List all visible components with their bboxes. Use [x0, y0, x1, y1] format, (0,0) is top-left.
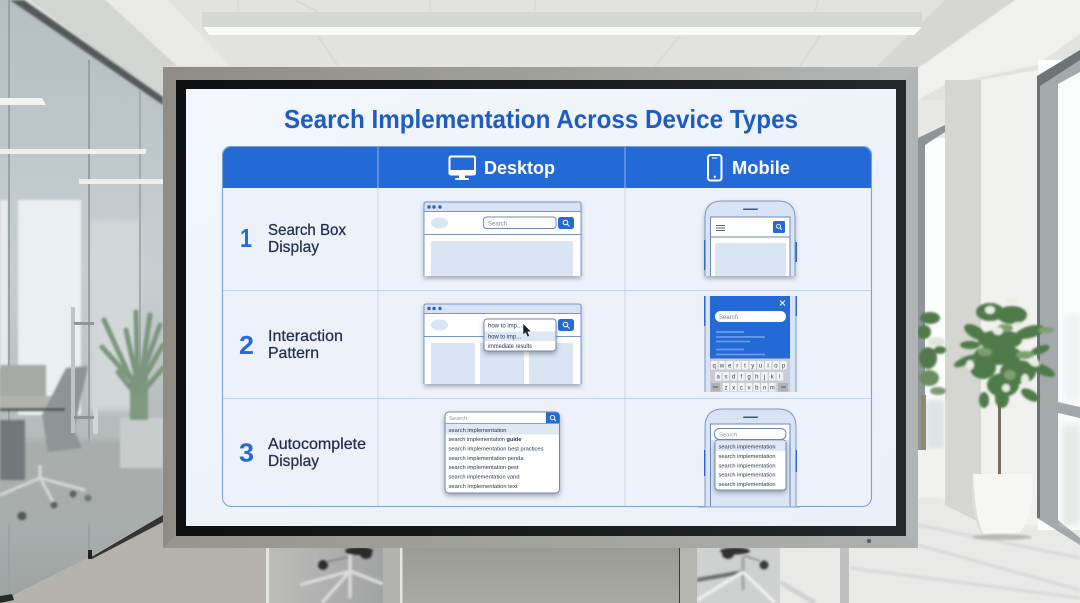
desktop mockup: autocomplete display: search implementation guide: [448, 437, 522, 443]
row 2 label: Pattern: [268, 345, 319, 362]
meeting table and chair: [0, 365, 92, 520]
small plant in white pot: [917, 312, 946, 500]
mobile mockup: search box: [704, 201, 797, 276]
desktop mockup: autocomplete display: search implementation penda: [448, 456, 524, 462]
meeting room plant: [102, 312, 163, 468]
left office chair base: [269, 547, 383, 603]
glass partition wall: [0, 0, 163, 603]
floor: [0, 500, 1080, 603]
right wall and pillar: [918, 70, 1038, 525]
ceiling: [0, 0, 1080, 130]
on-screen keyboard: q: [713, 364, 716, 370]
on-screen keyboard: f: [740, 374, 742, 380]
desktop mockup: search box: [424, 202, 581, 277]
icon: mobile phone: [708, 155, 722, 180]
screen panel: [186, 89, 896, 526]
right office chair base: [697, 548, 815, 603]
desktop mockup: autocomplete display: search implementation vand: [448, 474, 520, 480]
mobile mockup: autocomplete: search implementation: [718, 454, 776, 460]
on-screen keyboard: o: [774, 364, 778, 370]
mobile mockup: autocomplete: search implementation: [718, 463, 776, 469]
display stand: [383, 548, 849, 603]
icon: mouse cursor: [523, 324, 531, 337]
row 1 label: Display: [268, 239, 319, 256]
row 1 label: Search Box: [268, 222, 346, 239]
search dropdown: how to imp...: [488, 322, 522, 330]
on-screen keyboard: z: [724, 386, 728, 392]
on-screen keyboard: v: [748, 386, 750, 392]
mobile mockup: autocomplete: search implementation: [718, 482, 776, 488]
desktop mockup: search box: Search: [488, 222, 507, 228]
mobile mockup: autocomplete: [698, 409, 800, 507]
row 1 label: 1: [240, 223, 252, 253]
header: desktop: Desktop: [484, 157, 555, 178]
comparison table: [222, 146, 872, 507]
on-screen keyboard: a: [717, 374, 721, 380]
desktop mockup: autocomplete display: search implementation text: [448, 484, 518, 490]
row 2 label: [239, 328, 343, 362]
table header bar: [222, 146, 872, 188]
mobile mockup: interaction with keyboard: [704, 296, 797, 392]
mobile mockup: autocomplete: search implementation: [718, 444, 776, 450]
desktop mockup: autocomplete display: Search: [449, 416, 467, 422]
row 3 label: Display: [268, 453, 319, 470]
search dropdown: immediate results: [488, 343, 532, 350]
mobile mockup: interaction with keyboard: Search: [719, 315, 738, 321]
title: Search Implementation Across Device Types: [284, 104, 798, 134]
row 3 label: 3: [239, 438, 254, 468]
on-screen keyboard: i: [767, 364, 769, 370]
desktop mockup: autocomplete display: search implementation: [448, 428, 506, 434]
row 3 label: [239, 436, 366, 470]
icon: desktop monitor: [449, 156, 475, 180]
right window: [1037, 50, 1080, 545]
on-screen keyboard: t: [744, 364, 746, 370]
on-screen keyboard: j: [763, 374, 765, 380]
row 2 label: Interaction: [268, 328, 343, 345]
header: mobile: Mobile: [732, 157, 790, 178]
desktop mockup: autocomplete display: [445, 412, 560, 493]
desktop mockup: autocomplete display: search implementation pest: [448, 465, 519, 471]
mobile mockup: autocomplete: Search: [719, 432, 737, 438]
on-screen keyboard: d: [732, 374, 735, 380]
on-screen keyboard: n: [763, 386, 766, 392]
on-screen keyboard: p: [782, 364, 786, 370]
on-screen keyboard: u: [759, 364, 762, 370]
on-screen keyboard: k: [771, 374, 775, 380]
on-screen keyboard: w: [719, 364, 725, 370]
desktop mockup: interaction pattern: [424, 304, 581, 385]
on-screen keyboard: g: [747, 374, 751, 380]
search dropdown: [484, 319, 556, 351]
on-screen keyboard: m: [770, 386, 775, 392]
desktop mockup: autocomplete display: search implementation best practices: [448, 446, 544, 452]
ceiling light fixture: [202, 12, 922, 35]
on-screen keyboard: l: [779, 374, 780, 380]
mobile mockup: autocomplete: search implementation: [718, 473, 776, 479]
on-screen keyboard: s: [724, 374, 728, 380]
on-screen keyboard: r: [736, 364, 738, 370]
on-screen keyboard: x: [732, 386, 735, 392]
on-screen keyboard: b: [755, 386, 759, 392]
on-screen keyboard: y: [751, 364, 754, 370]
on-screen keyboard: e: [728, 364, 732, 370]
on-screen keyboard: h: [755, 374, 758, 380]
row 2 label: 2: [239, 330, 254, 360]
door handle: [71, 306, 98, 434]
on-screen keyboard: [710, 358, 790, 392]
display frame: [163, 67, 918, 548]
on-screen keyboard: c: [740, 386, 743, 392]
row 3 label: Autocomplete: [268, 436, 366, 453]
large plant in white pot: [952, 298, 1057, 540]
search dropdown: how to imp...: [488, 334, 521, 340]
row 1 label: [240, 222, 346, 256]
